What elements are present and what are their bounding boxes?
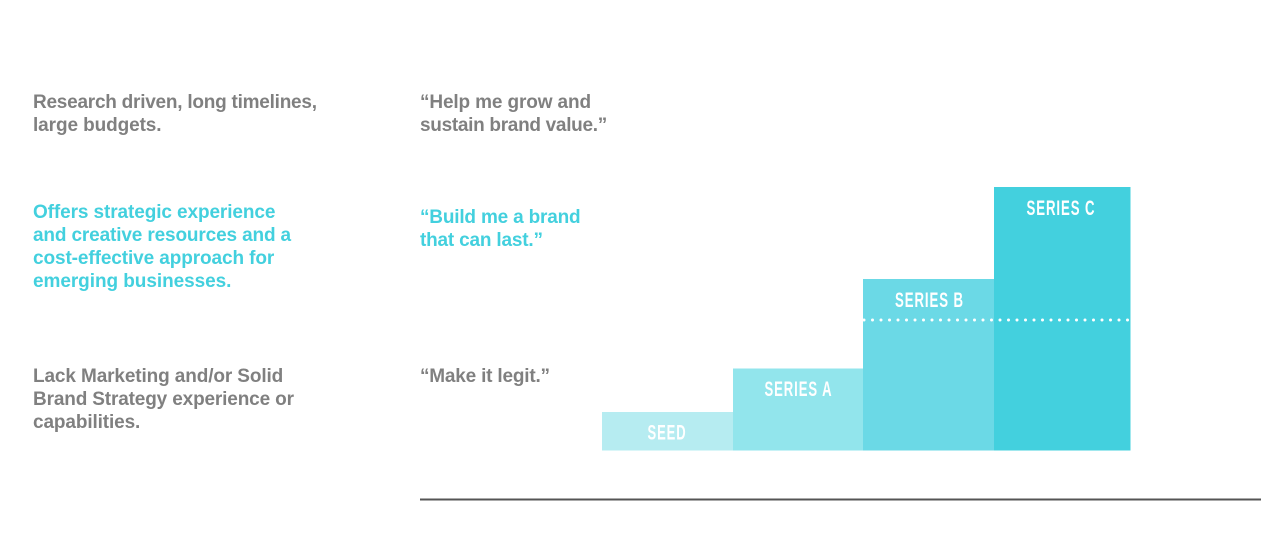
quote: grow and sustain: sustain brand value.” xyxy=(420,115,607,136)
bar: series C: SERIES C xyxy=(1026,196,1096,220)
text: research agencies description xyxy=(33,92,317,136)
bar: series B: SERIES B xyxy=(895,288,964,312)
quote: build a brand xyxy=(420,207,580,251)
quote: make it legit: “Make it legit.” xyxy=(420,366,550,387)
text: strategic partner description: cost-effective approach for xyxy=(33,248,274,269)
text: lacking marketing description xyxy=(33,366,294,433)
text: strategic partner description: and creative resources and a xyxy=(33,225,291,246)
text: lacking marketing description: capabilities. xyxy=(33,412,140,433)
bar: series B xyxy=(863,279,994,450)
text: lacking marketing description: Lack Marketing and/or Solid xyxy=(33,366,283,387)
bar: series A xyxy=(733,368,864,450)
quote: build a brand: “Build me a brand xyxy=(420,207,580,228)
bar: series C xyxy=(994,187,1130,450)
text: strategic partner description: Offers strategic experience xyxy=(33,202,275,223)
bar: series A: SERIES A xyxy=(764,377,832,401)
text: lacking marketing description: Brand Strategy experience or xyxy=(33,389,294,410)
quote: build a brand: that can last.” xyxy=(420,230,543,251)
bar: seed xyxy=(602,412,733,450)
text: strategic partner description xyxy=(33,202,292,292)
text: research agencies description: large budgets. xyxy=(33,115,161,136)
quote: grow and sustain: “Help me grow and xyxy=(420,92,591,113)
quote: grow and sustain xyxy=(420,92,607,136)
text: research agencies description: Research driven, long timelines, xyxy=(33,92,317,113)
text: strategic partner description: emerging businesses. xyxy=(33,271,231,292)
bar: seed: SEED xyxy=(648,420,686,444)
